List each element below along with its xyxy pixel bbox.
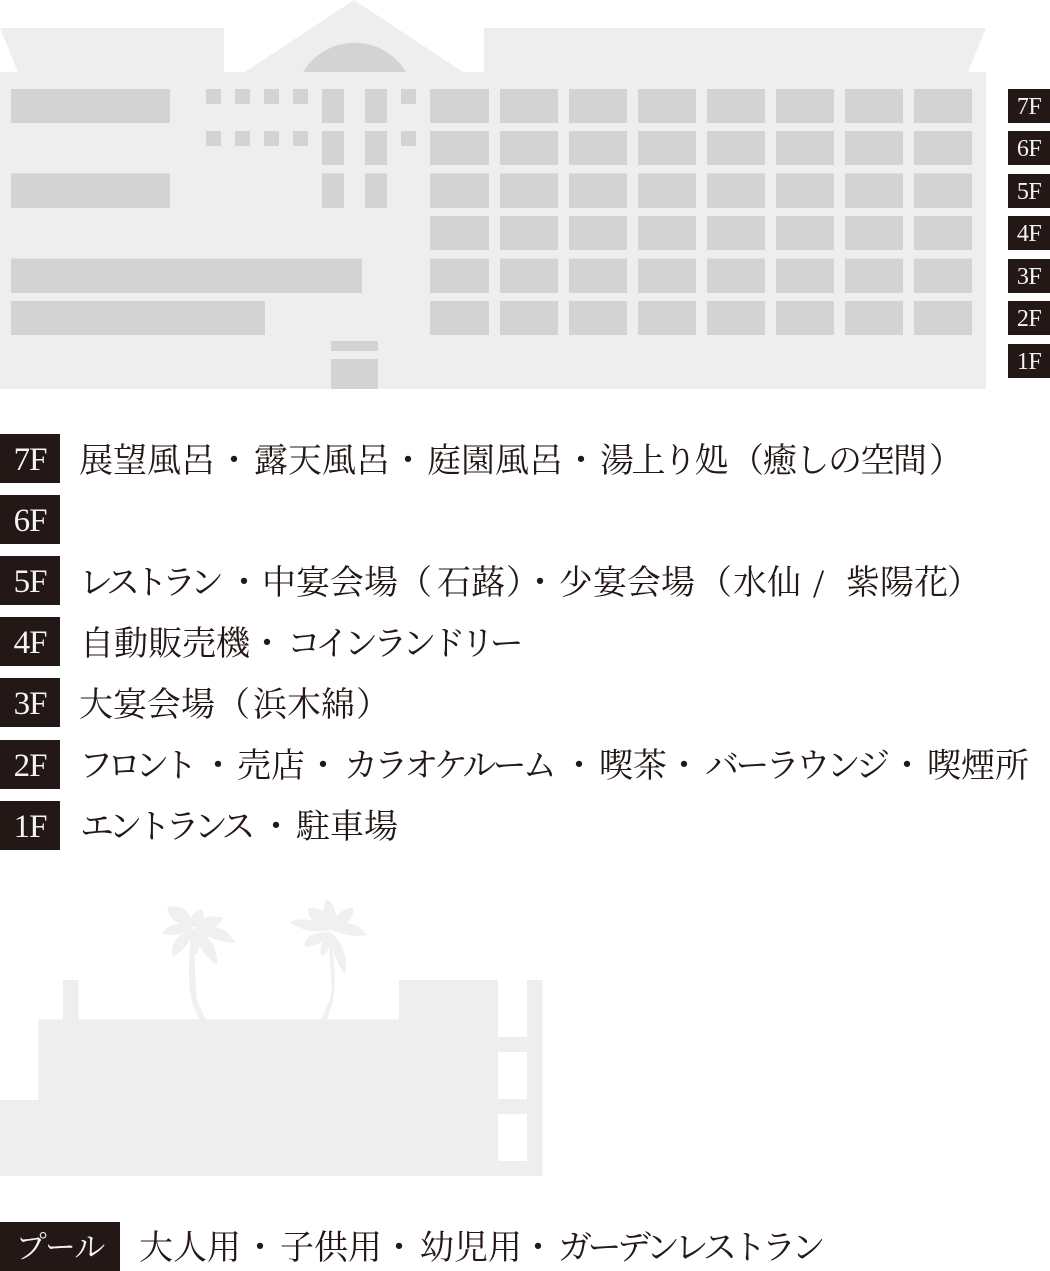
- legend text 2F: 売店: [237, 748, 305, 785]
- legend text 3F: [79, 686, 390, 724]
- legend text 5F: レストラン: [79, 564, 218, 602]
- legend text 5F: ・: [227, 564, 261, 602]
- pool legend text: 子供用: [280, 1230, 382, 1267]
- legend text 1F: ・: [259, 809, 293, 846]
- legend text 5F: /: [813, 560, 824, 606]
- floor tag 6F: [1008, 131, 1050, 165]
- legend text 2F: [79, 748, 1029, 785]
- floor tag 1F: [1008, 344, 1050, 378]
- legend badge 5F: 5F: [14, 564, 46, 600]
- legend badge 2F: [0, 740, 60, 788]
- legend badge 1F: [0, 800, 60, 850]
- legend text 4F: [80, 626, 520, 662]
- legend text 2F: ・: [201, 748, 235, 785]
- legend badge 7F: 7F: [14, 442, 46, 478]
- legend text 5F: [79, 560, 981, 606]
- legend text 2F: 喫煙所: [927, 748, 1029, 785]
- legend text 3F: 浜木綿: [253, 686, 355, 724]
- legend text 5F: （: [698, 564, 732, 602]
- legend text 3F: ）: [356, 686, 390, 724]
- legend badge 3F: [0, 678, 60, 727]
- legend text 2F: フロント: [79, 748, 192, 785]
- legend text 2F: ・: [306, 748, 340, 785]
- legend text 7F: ・: [217, 442, 251, 480]
- legend text 2F: バーラウンジ: [705, 748, 887, 785]
- pool legend text: 大人用: [139, 1230, 241, 1267]
- legend text 4F: ・: [250, 626, 284, 662]
- legend text 2F: ・: [667, 748, 701, 785]
- legend text 3F: （: [216, 686, 250, 724]
- legend text 1F: [80, 809, 398, 846]
- legend badge 4F: 4F: [14, 625, 46, 661]
- pool building body: [0, 980, 542, 1176]
- pool badge: プール: [16, 1230, 104, 1264]
- legend text 7F: 癒しの空間: [763, 442, 926, 480]
- legend badge 6F: 6F: [14, 503, 46, 539]
- legend text 5F: 石蕗: [437, 564, 505, 602]
- legend text 5F: （: [398, 564, 432, 602]
- floor tag 2F: 2F: [1017, 306, 1041, 332]
- pool legend text: ・: [382, 1230, 416, 1267]
- legend text 7F: 露天風呂: [254, 442, 390, 480]
- legend text 1F: 駐車場: [296, 809, 398, 846]
- floor tag 2F: [1008, 301, 1050, 335]
- legend text 5F: 水仙: [733, 564, 801, 602]
- legend text 7F: 庭園風呂: [427, 442, 563, 480]
- legend text 2F: ・: [890, 748, 924, 785]
- floor tag 3F: 3F: [1017, 264, 1041, 290]
- icon: palm tree right: [289, 899, 367, 1020]
- floor tag 5F: 5F: [1017, 178, 1041, 204]
- floor tag 7F: [1008, 89, 1050, 123]
- legend text 5F: 中宴会場: [262, 564, 398, 602]
- legend text 2F: 喫茶: [599, 748, 667, 785]
- legend badge 1F: 1F: [14, 808, 46, 844]
- legend text 7F: [79, 442, 963, 480]
- floor tag 3F: [1008, 258, 1050, 292]
- legend text 7F: ・: [564, 442, 598, 480]
- legend badge 3F: 3F: [14, 686, 46, 722]
- floor tag 6F: 6F: [1017, 136, 1041, 162]
- legend text 7F: （: [730, 442, 764, 480]
- legend text 5F: ）: [506, 564, 540, 602]
- legend text 5F: ）: [947, 564, 981, 602]
- floor tag 7F: 7F: [1017, 94, 1041, 120]
- pool legend text: ・: [521, 1230, 555, 1267]
- floor tag 4F: [1008, 216, 1050, 250]
- floor tag 4F: 4F: [1017, 221, 1041, 247]
- legend badge 4F: [0, 617, 60, 666]
- legend text 7F: ）: [929, 442, 963, 480]
- floor tag 1F: 1F: [1017, 348, 1041, 374]
- legend text 3F: 大宴会場: [79, 686, 215, 724]
- pool legend text: ・: [243, 1230, 277, 1267]
- legend badge 7F: [0, 434, 60, 483]
- pool legend text: [139, 1230, 822, 1267]
- legend text 7F: ・: [391, 442, 425, 480]
- legend text 7F: 湯上り処: [600, 442, 726, 480]
- legend text 5F: 紫陽花: [846, 564, 948, 602]
- legend text 2F: カラオケルーム: [344, 748, 553, 785]
- legend text 2F: ・: [562, 748, 596, 785]
- legend text 5F: 少宴会場: [559, 564, 695, 602]
- legend badge 6F: [0, 495, 60, 544]
- legend badge 2F: 2F: [14, 748, 46, 784]
- pool legend text: ガーデンレストラン: [558, 1230, 821, 1267]
- building elevation: [0, 0, 986, 389]
- legend badge 5F: [0, 556, 60, 605]
- pool legend text: 幼児用: [420, 1230, 522, 1267]
- legend text 1F: エントランス: [80, 809, 250, 846]
- legend text 5F: ・: [523, 564, 557, 602]
- floor tag 5F: [1008, 174, 1050, 208]
- legend text 4F: 自動販売機: [80, 626, 250, 662]
- icon: palm tree left: [162, 906, 235, 1020]
- pool badge: [0, 1222, 120, 1270]
- legend text 7F: 展望風呂: [79, 442, 215, 480]
- legend text 4F: コインランドリー: [287, 626, 519, 662]
